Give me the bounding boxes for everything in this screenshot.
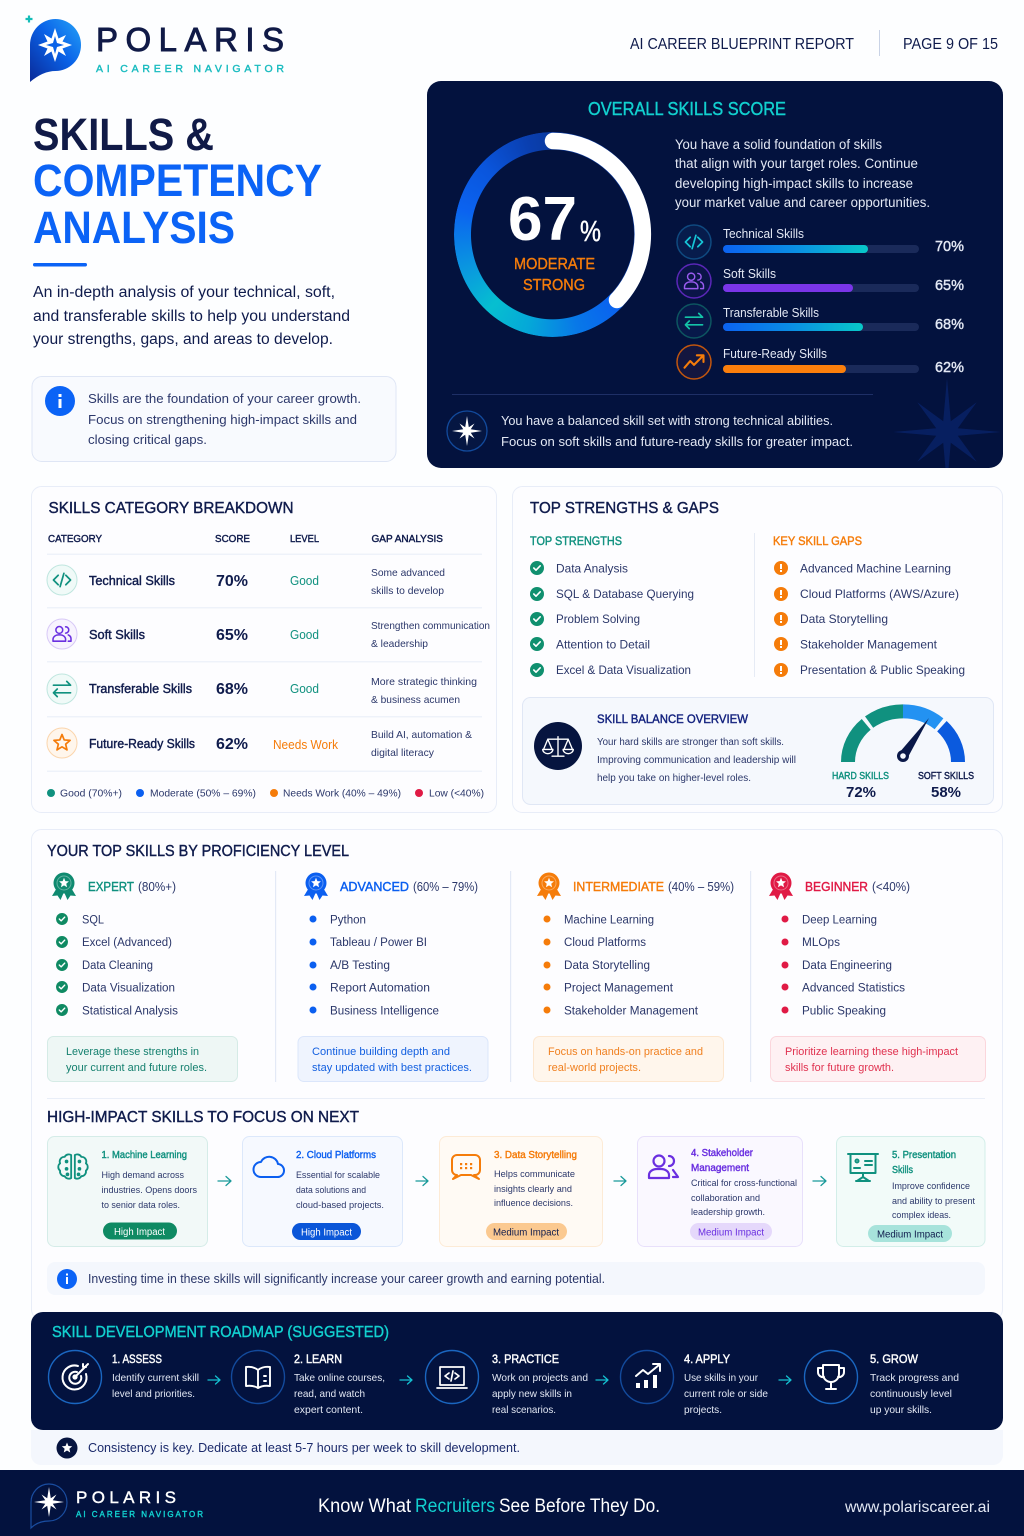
- heading: category breakdown: SKILLS CATEGORY BREAKDOWN: [48, 500, 294, 517]
- list: top strengths: TOP STRENGTHS: [530, 536, 622, 548]
- panel: overall skills score: [427, 81, 1003, 486]
- table header: LEVEL: [290, 534, 319, 545]
- note: consistency: Consistency is key. Dedicate at least 5-7 hours per week to skill development.: [88, 1441, 520, 1455]
- arrow: [208, 1376, 220, 1384]
- column: intermediate: (40% – 59%): [668, 880, 734, 894]
- card: data storytelling: Helps communicate: [494, 1169, 575, 1180]
- bar: soft skills: [677, 264, 964, 298]
- bar: future-ready skills: [677, 345, 964, 379]
- legend: [47, 788, 484, 800]
- note: consistency: [31, 1430, 1003, 1465]
- column: intermediate: Project Management: [564, 982, 674, 994]
- card: presentation skills: Improve confidence: [892, 1181, 970, 1192]
- step: practice: Work on projects and: [492, 1372, 588, 1384]
- step: practice: 3. PRACTICE: [492, 1354, 559, 1366]
- card: machine learning: to senior data roles.: [102, 1200, 180, 1211]
- column: beginner: Deep Learning: [802, 914, 877, 926]
- column: intermediate: INTERMEDIATE: [573, 880, 664, 894]
- heading: proficiency level: YOUR TOP SKILLS BY PROFICIENCY LEVEL: [47, 843, 349, 860]
- column: beginner: Public Speaking: [802, 1006, 886, 1018]
- column: expert: EXPERT: [88, 880, 134, 894]
- row: soft skills: 65%: [216, 627, 248, 644]
- title: COMPETENCY: [33, 155, 322, 206]
- row: transferable skills: [47, 674, 477, 706]
- intro text: and transferable skills to help you understand: [33, 308, 350, 325]
- step: apply: current role or side: [684, 1388, 768, 1400]
- footer: [0, 1470, 1024, 1536]
- list: key skill gaps: Advanced Machine Learning: [800, 562, 951, 576]
- step: apply: Use skills in your: [684, 1372, 758, 1384]
- column: beginner: MLOps: [802, 937, 840, 949]
- card: cloud platforms: data solutions and: [296, 1185, 366, 1196]
- report name: AI CAREER BLUEPRINT REPORT: [630, 36, 854, 53]
- step: assess: Identify current skill: [112, 1372, 199, 1384]
- bar: technical skills: [677, 225, 964, 259]
- icon: people: [649, 1156, 678, 1178]
- column: beginner: [769, 872, 986, 1082]
- card: cloud platforms: Essential for scalable: [296, 1170, 380, 1181]
- panel: skill balance overview: Your hard skills are stronger than soft skills.: [597, 737, 784, 748]
- row: soft skills: Soft Skills: [89, 628, 145, 642]
- step: learn: Take online courses,: [294, 1372, 385, 1384]
- row: future-ready skills: [47, 728, 472, 759]
- step: grow: [804, 1350, 959, 1416]
- gauge values: 58%: [931, 785, 961, 801]
- row: transferable skills: More strategic thinking: [371, 676, 477, 688]
- row: technical skills: Some advanced: [371, 567, 445, 579]
- note: investing time: Investing time in these skills will significantly increase your career growth and earning potential.: [88, 1272, 605, 1286]
- row: soft skills: Good: [290, 628, 319, 642]
- intro text: [33, 284, 350, 348]
- card: data storytelling: 3. Data Storytelling: [494, 1150, 577, 1161]
- legend: Needs Work (40% – 49%): [283, 788, 401, 800]
- row: future-ready skills: Build AI, automation &: [371, 729, 472, 741]
- gauge values: [832, 771, 974, 801]
- column: expert: Excel (Advanced): [82, 937, 172, 949]
- donut chart: 67%: 67: [508, 185, 577, 254]
- column: advanced: ADVANCED: [340, 880, 409, 894]
- bar: transferable skills: [677, 304, 964, 338]
- card: cloud platforms: cloud-based projects.: [296, 1200, 384, 1211]
- legend: Moderate (50% – 69%): [150, 788, 256, 800]
- panel: skill balance overview: [522, 698, 994, 804]
- panel: skill balance overview: SKILL BALANCE OVERVIEW: [597, 714, 748, 726]
- table header: CATEGORY: [48, 534, 102, 545]
- step: assess: level and priorities.: [112, 1388, 195, 1400]
- step: grow: continuously level: [870, 1388, 952, 1400]
- logo: Polaris: [26, 16, 284, 82]
- column: beginner: (<40%): [872, 880, 910, 894]
- column: expert: Leverage these strengths in: [66, 1046, 199, 1058]
- step: learn: expert content.: [294, 1404, 363, 1416]
- card: stakeholder management: Management: [691, 1163, 749, 1174]
- column: intermediate: real-world projects.: [548, 1062, 641, 1074]
- column: expert: Data Visualization: [82, 982, 175, 994]
- title: SKILLS &: [33, 109, 214, 160]
- website: www.polariscareer.ai: [844, 1499, 990, 1516]
- card: presentation skills: complex ideas.: [892, 1210, 951, 1221]
- column: beginner: Prioritize learning these high-impact: [785, 1046, 958, 1058]
- row: technical skills: Technical Skills: [89, 574, 175, 588]
- card: stakeholder management: 4. Stakeholder: [691, 1148, 754, 1159]
- legend: Good (70%+): [60, 788, 122, 800]
- step: learn: read, and watch: [294, 1388, 365, 1400]
- card: machine learning: 1. Machine Learning: [102, 1150, 187, 1161]
- intro text: An in-depth analysis of your technical, soft,: [33, 284, 335, 301]
- footer logo: POLARIS: [76, 1488, 176, 1507]
- list: key skill gaps: Cloud Platforms (AWS/Azure): [800, 587, 959, 601]
- donut chart: 67%: STRONG: [523, 277, 585, 294]
- column: intermediate: [534, 872, 734, 1082]
- column: advanced: Python: [330, 914, 366, 926]
- card: machine learning: High demand across: [102, 1170, 184, 1181]
- row: future-ready skills: Future-Ready Skills: [89, 737, 195, 751]
- gauge values: 72%: [846, 785, 876, 801]
- card: data storytelling: insights clearly and: [494, 1184, 572, 1195]
- step: practice: [426, 1350, 588, 1416]
- list: key skill gaps: [773, 536, 965, 677]
- arrow: [596, 1376, 608, 1384]
- column: intermediate: Focus on hands-on practice and: [548, 1046, 703, 1058]
- row: soft skills: Strengthen communication: [371, 620, 490, 632]
- column: intermediate: Data Storytelling: [564, 960, 650, 972]
- note: investing time: [47, 1262, 985, 1295]
- title: [33, 109, 322, 266]
- score description: your market value and career opportunities.: [675, 195, 930, 210]
- score description: that align with your target roles. Continue: [675, 156, 918, 171]
- step: learn: 2. LEARN: [294, 1354, 342, 1366]
- bar: technical skills: 70%: [935, 239, 964, 255]
- panel: skill balance overview: Improving communication and leadership will: [597, 755, 796, 766]
- column: expert: Statistical Analysis: [82, 1006, 178, 1018]
- tagline: Recruiters: [415, 1496, 495, 1517]
- step: assess: 1. ASSESS: [112, 1354, 162, 1366]
- icon: cloud: [254, 1157, 284, 1177]
- tagline: Know What: [318, 1496, 412, 1517]
- card: presentation skills: and ability to present: [892, 1196, 975, 1207]
- column: expert: your current and future roles.: [66, 1062, 207, 1074]
- header: [26, 16, 998, 82]
- table header: [48, 534, 443, 545]
- card: stakeholder management: leadership growth.: [691, 1207, 765, 1218]
- gauge values: HARD SKILLS: [832, 771, 889, 782]
- step: apply: projects.: [684, 1404, 722, 1416]
- step: assess: [48, 1350, 199, 1404]
- row: technical skills: [47, 565, 445, 597]
- row: technical skills: 70%: [216, 573, 248, 590]
- column: expert: (80%+): [138, 880, 176, 894]
- column: advanced: Continue building depth and: [312, 1046, 450, 1058]
- card: presentation skills: 5. Presentation: [892, 1150, 956, 1161]
- arrow: [218, 1176, 231, 1186]
- footer logo: AI CAREER NAVIGATOR: [76, 1510, 203, 1519]
- column: advanced: [298, 872, 488, 1082]
- list: top strengths: Problem Solving: [556, 612, 640, 626]
- column: beginner: BEGINNER: [805, 880, 868, 894]
- card: machine learning: industries. Opens doors: [102, 1185, 197, 1196]
- legend: Low (<40%): [429, 788, 484, 800]
- list: top strengths: Data Analysis: [556, 562, 628, 576]
- card: presentation skills: Medium Impact: [877, 1230, 943, 1240]
- table header: GAP ANALYSIS: [372, 534, 443, 545]
- panel: skills category breakdown: [32, 486, 496, 812]
- heading: overall score: OVERALL SKILLS SCORE: [588, 99, 786, 119]
- card: cloud platforms: High Impact: [301, 1228, 352, 1238]
- step: grow: 5. GROW: [870, 1354, 918, 1366]
- column: intermediate: Machine Learning: [564, 914, 654, 926]
- list: top strengths: Attention to Detail: [556, 638, 650, 652]
- arrow: [779, 1376, 791, 1384]
- column: advanced: A/B Testing: [330, 960, 390, 972]
- column: expert: [48, 872, 238, 1082]
- info callout: [32, 376, 396, 462]
- row: transferable skills: & business acumen: [371, 694, 460, 706]
- icon: faint compass: [894, 380, 1000, 468]
- column: beginner: Data Engineering: [802, 960, 892, 972]
- column: intermediate: Cloud Platforms: [564, 937, 646, 949]
- row: transferable skills: Good: [290, 682, 319, 696]
- row: transferable skills: 68%: [216, 681, 248, 698]
- icon: brain: [58, 1154, 88, 1179]
- card: machine learning: [48, 1136, 208, 1246]
- panel: top strengths and gaps: [512, 486, 1002, 812]
- card: presentation skills: [836, 1136, 985, 1246]
- gauge: hard versus soft skills: [848, 711, 958, 762]
- column: advanced: Business Intelligence: [330, 1006, 439, 1018]
- arrow: [400, 1376, 412, 1384]
- list: top strengths: SQL & Database Querying: [556, 587, 694, 601]
- column: advanced: (60% – 79%): [413, 880, 478, 894]
- info callout: Focus on strengthening high-impact skills and: [88, 412, 357, 427]
- column: expert: Data Cleaning: [82, 960, 153, 972]
- card: stakeholder management: collaboration and: [691, 1193, 760, 1204]
- heading: strengths and gaps: TOP STRENGTHS & GAPS: [530, 500, 719, 517]
- row: soft skills: [47, 619, 490, 650]
- tagline: [318, 1496, 660, 1517]
- arrow: [614, 1176, 626, 1186]
- card: stakeholder management: Critical for cross-functional: [691, 1178, 797, 1189]
- list: key skill gaps: Stakeholder Management: [800, 638, 938, 652]
- card: data storytelling: Medium Impact: [493, 1228, 559, 1238]
- donut chart: 67%: [454, 132, 651, 337]
- icon: pin logo: [26, 16, 81, 82]
- list: key skill gaps: Presentation & Public Speaking: [800, 663, 965, 677]
- table header: SCORE: [215, 534, 250, 545]
- bar: transferable skills: Transferable Skills: [723, 306, 819, 320]
- bar: transferable skills: 68%: [935, 317, 964, 333]
- row: future-ready skills: 62%: [216, 736, 248, 753]
- step: grow: Track progress and: [870, 1372, 959, 1384]
- arrow: [416, 1176, 428, 1186]
- card: data storytelling: [440, 1136, 602, 1246]
- logo: Polaris: POLARIS: [96, 21, 284, 58]
- column: advanced: Tableau / Power BI: [330, 937, 427, 949]
- icon: scales: [534, 722, 582, 770]
- page number: PAGE 9 OF 15: [903, 36, 998, 53]
- logo: Polaris: AI CAREER NAVIGATOR: [96, 63, 284, 75]
- gauge values: SOFT SKILLS: [918, 771, 974, 782]
- list: top strengths: Excel & Data Visualization: [556, 663, 691, 677]
- arrow: [813, 1176, 826, 1186]
- panel: roadmap: [31, 1312, 1003, 1430]
- row: future-ready skills: Needs Work: [273, 738, 339, 752]
- step: practice: real scenarios.: [492, 1404, 556, 1416]
- column: expert: SQL: [82, 914, 105, 926]
- info callout: closing critical gaps.: [88, 432, 207, 447]
- row: technical skills: Good: [290, 574, 319, 588]
- step: learn: [232, 1350, 385, 1416]
- score description: [675, 137, 930, 210]
- info callout: Skills are the foundation of your career growth.: [88, 391, 361, 406]
- card: presentation skills: Skills: [892, 1165, 913, 1176]
- panel: skill balance overview: help you take on higher-level roles.: [597, 773, 751, 784]
- card: stakeholder management: Medium Impact: [698, 1228, 764, 1238]
- row: technical skills: skills to develop: [371, 585, 444, 597]
- list: key skill gaps: Data Storytelling: [800, 612, 888, 626]
- title: ANALYSIS: [33, 202, 235, 253]
- card: cloud platforms: 2. Cloud Platforms: [296, 1150, 376, 1161]
- heading: high impact skills: HIGH-IMPACT SKILLS TO FOCUS ON NEXT: [47, 1109, 359, 1126]
- bar: soft skills: Soft Skills: [723, 267, 776, 281]
- donut chart: 67%: MODERATE: [514, 256, 595, 273]
- column: advanced: stay updated with best practices.: [312, 1062, 472, 1074]
- card: data storytelling: influence decisions.: [494, 1198, 573, 1209]
- icon: info: [45, 386, 75, 416]
- summary note: [447, 411, 853, 451]
- column: beginner: Advanced Statistics: [802, 982, 905, 994]
- summary note: You have a balanced skill set with strong technical abilities.: [501, 413, 833, 428]
- list: key skill gaps: KEY SKILL GAPS: [773, 536, 862, 548]
- donut chart: 67%: %: [580, 216, 601, 248]
- step: practice: apply new skills in: [492, 1388, 572, 1400]
- panel: proficiency and high impact: [32, 830, 1002, 1320]
- step: apply: 4. APPLY: [684, 1354, 730, 1366]
- score description: You have a solid foundation of skills: [675, 137, 882, 152]
- row: future-ready skills: digital literacy: [371, 747, 435, 759]
- card: machine learning: High Impact: [114, 1227, 165, 1238]
- icon: chat bubble: [452, 1155, 480, 1179]
- bar: future-ready skills: Future-Ready Skills: [723, 347, 827, 361]
- bar: technical skills: Technical Skills: [723, 227, 804, 241]
- row: soft skills: & leadership: [371, 638, 428, 650]
- list: top strengths: [530, 536, 694, 677]
- bar: soft skills: 65%: [935, 278, 964, 294]
- column: advanced: Report Automation: [330, 982, 430, 994]
- intro text: your strengths, gaps, and areas to develop.: [33, 331, 333, 348]
- card: stakeholder management: [638, 1136, 802, 1246]
- icon: presentation board: [848, 1154, 878, 1181]
- heading: roadmap: SKILL DEVELOPMENT ROADMAP (SUGGESTED): [52, 1324, 389, 1341]
- tagline: See Before They Do.: [499, 1496, 660, 1517]
- footer logo: [31, 1484, 203, 1528]
- column: intermediate: Stakeholder Management: [564, 1006, 699, 1018]
- card: cloud platforms: [242, 1136, 402, 1246]
- step: grow: up your skills.: [870, 1404, 932, 1416]
- row: transferable skills: Transferable Skills: [89, 682, 192, 696]
- column: beginner: skills for future growth.: [785, 1062, 894, 1074]
- score description: developing high-impact skills to increase: [675, 176, 913, 191]
- step: apply: [620, 1350, 768, 1416]
- summary note: Focus on soft skills and future-ready skills for greater impact.: [501, 434, 853, 449]
- bar: future-ready skills: 62%: [935, 360, 964, 376]
